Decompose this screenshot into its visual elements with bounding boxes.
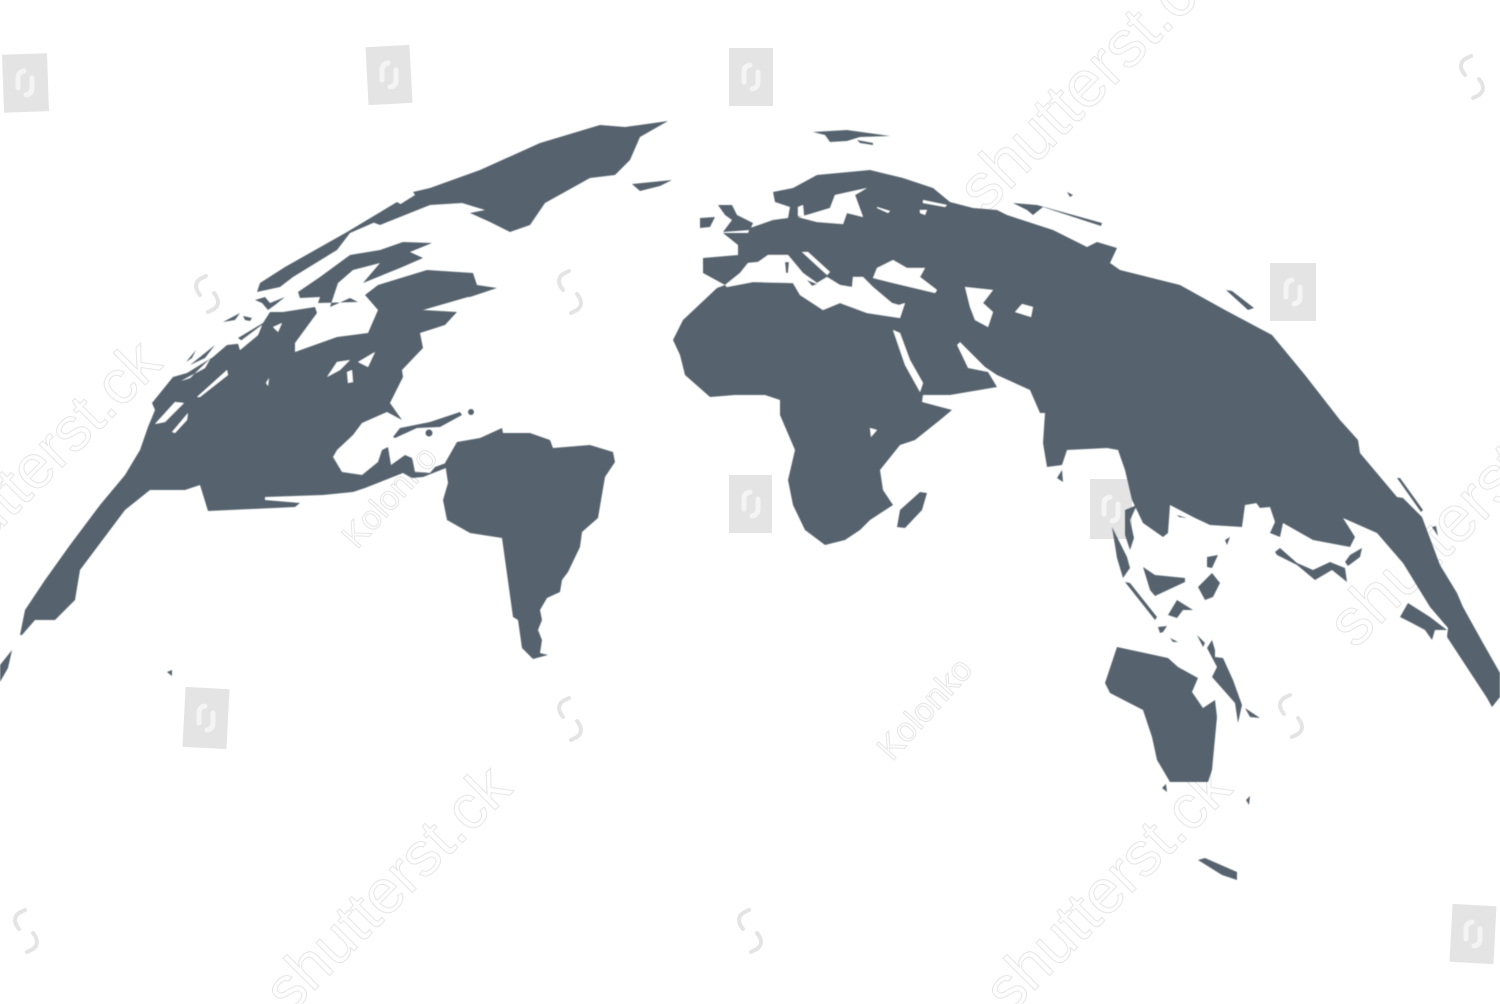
Australia [1105, 647, 1217, 782]
Eurasia and Africa [673, 170, 1500, 707]
New Zealand and small islands [167, 670, 1250, 880]
Japan [1397, 478, 1447, 640]
Arctic Ocean islands [813, 130, 1254, 310]
Canadian Arctic islands [186, 202, 432, 365]
southern sliver [0, 650, 12, 682]
Greenland [372, 121, 668, 232]
North America [20, 270, 497, 635]
watermark layer: Kolonko [870, 651, 980, 767]
South America [443, 428, 615, 659]
Southeast Asia islands [1057, 470, 1362, 723]
Britain and Ireland [700, 205, 753, 232]
Madagascar [897, 492, 927, 528]
continents [0, 121, 1500, 880]
Caribbean islands [393, 409, 474, 438]
Iceland [632, 180, 672, 191]
watermark layer: Kolonko [335, 439, 445, 555]
